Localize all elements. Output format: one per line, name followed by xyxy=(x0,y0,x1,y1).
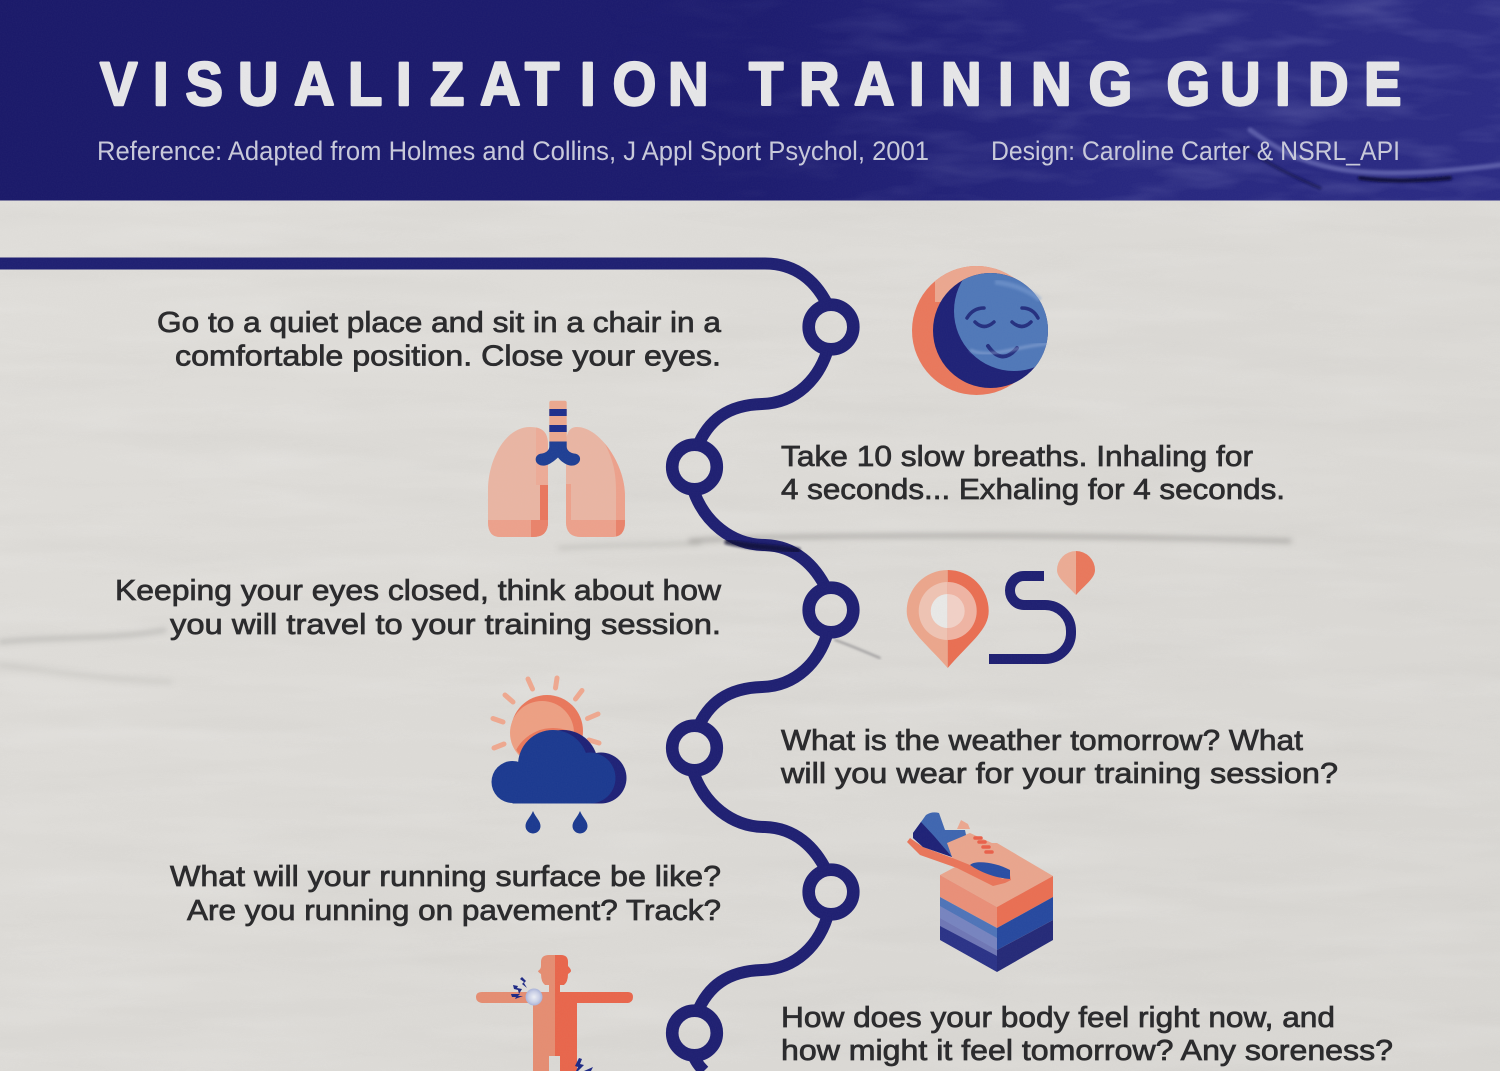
design credit: Design: Caroline Carter & NSRL_API xyxy=(991,136,1400,166)
icon: sleeping moon xyxy=(912,266,1048,395)
step marker 2 xyxy=(672,445,717,489)
step 4 text xyxy=(780,725,1338,790)
step 6 text xyxy=(781,1002,1393,1067)
step 3 text: Keeping your eyes closed, think about how xyxy=(115,575,722,607)
icon: body with soreness xyxy=(476,955,633,1071)
step 5 text: What will your running surface be like? xyxy=(170,861,721,893)
header title: VISUALIZATION TRAINING GUIDE xyxy=(100,51,1401,119)
icon: map pins and route xyxy=(907,551,1095,668)
step marker 6 xyxy=(672,1011,717,1055)
step 6 text: How does your body feel right now, and xyxy=(781,1002,1335,1034)
step 6 text: how might it feel tomorrow? Any soreness? xyxy=(781,1035,1393,1067)
icon: sun and rain cloud xyxy=(492,678,626,834)
step 3 text: you will travel to your training session. xyxy=(170,609,721,641)
step 3 text xyxy=(115,575,722,641)
step 1 text: Go to a quiet place and sit in a chair in a xyxy=(157,307,722,339)
reference credit: Reference: Adapted from Holmes and Collins, J Appl Sport Psychol, 2001 xyxy=(97,136,929,166)
step marker 3 xyxy=(809,588,853,632)
step 2 text: 4 seconds... Exhaling for 4 seconds. xyxy=(781,474,1285,506)
step 4 text: will you wear for your training session? xyxy=(780,758,1338,790)
step 5 text xyxy=(170,861,721,927)
step marker 1 xyxy=(809,305,853,349)
step marker 5 xyxy=(809,870,853,914)
step 2 text xyxy=(781,441,1285,506)
step 5 text: Are you running on pavement? Track? xyxy=(187,895,721,927)
icon: running shoe on ground layers xyxy=(907,812,1053,972)
icon: lungs xyxy=(485,401,630,540)
step 4 text: What is the weather tomorrow? What xyxy=(781,725,1303,757)
winding path timeline xyxy=(0,264,853,1071)
step 2 text: Take 10 slow breaths. Inhaling for xyxy=(781,441,1253,473)
step marker 4 xyxy=(672,726,717,770)
step 1 text xyxy=(157,307,722,372)
step 1 text: comfortable position. Close your eyes. xyxy=(175,340,721,372)
